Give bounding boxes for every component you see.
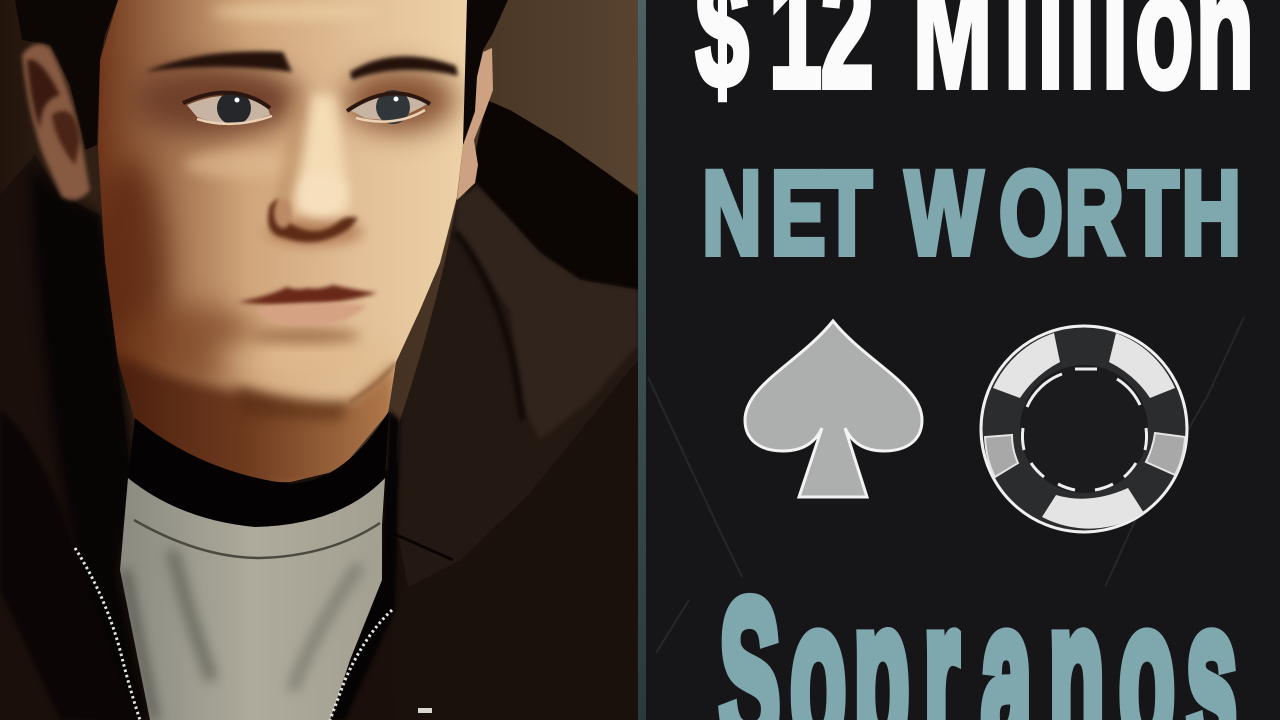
collar and shirt [120,411,389,720]
panel: net worth background [646,0,1280,720]
faint background lines [648,317,1244,653]
nose [267,173,363,246]
right hood lighter fold [395,186,638,587]
black collar [128,411,389,527]
neck [118,353,396,482]
hood fold line [455,232,522,420]
divider strip [638,0,646,720]
right eye [347,90,430,124]
black inner shadow by shirt [330,410,400,720]
icon: poker chip [981,326,1187,532]
lower right jacket [390,360,638,720]
left hood shadow [30,165,150,720]
nose bridge [296,95,348,215]
upper right hood black [475,100,638,290]
eyebrows [145,51,292,72]
heading: NET WORTH: NET WORTH [702,146,1241,279]
hair left [15,0,118,150]
t-shirt [120,478,385,720]
ear left [22,44,90,200]
left eye [183,91,272,125]
zipper tag [418,708,432,713]
ear right [457,48,493,200]
icon: spade [745,321,922,497]
zipper left [75,548,140,720]
panel: portrait [0,0,640,720]
jacket body [0,100,638,720]
face and neck [90,0,480,490]
hair right [463,0,508,145]
zipper right [330,610,392,720]
mouth [238,285,377,344]
